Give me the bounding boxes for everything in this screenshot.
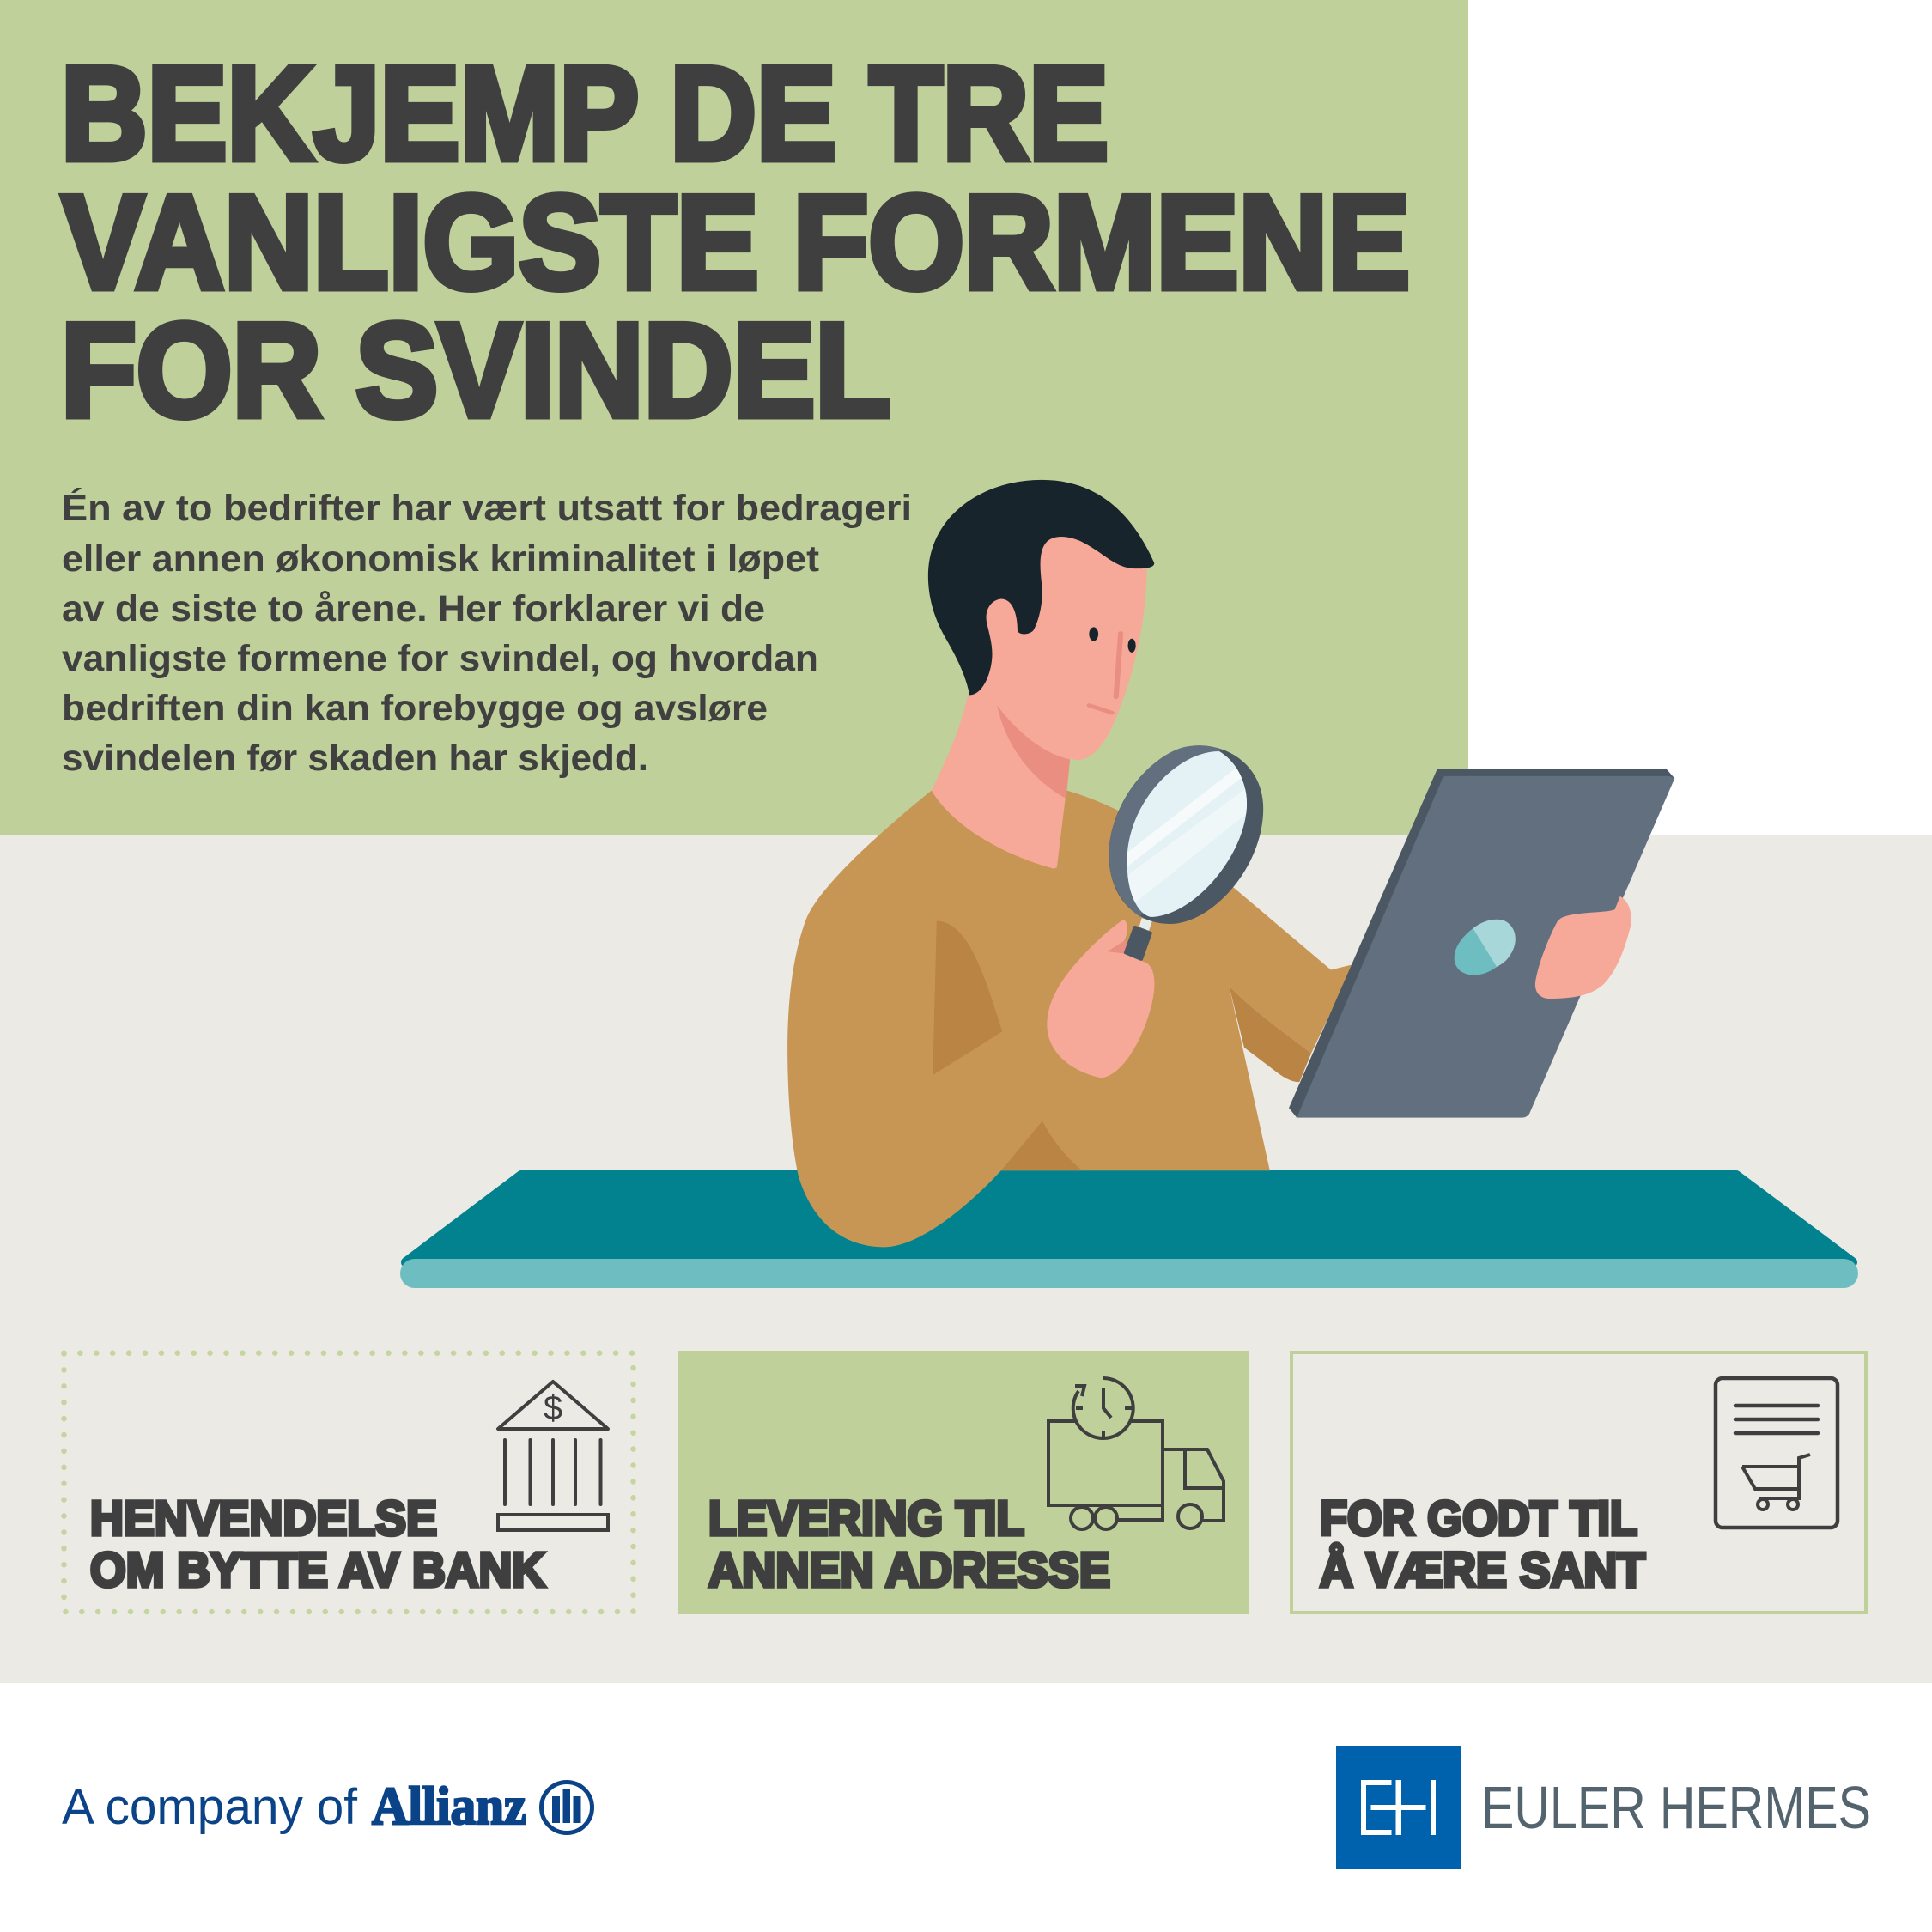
eyes <box>1089 627 1136 653</box>
icon: Allianz logo <box>541 1783 592 1832</box>
tablet <box>1289 769 1674 1118</box>
card heading: OM BYTTE AV BANK <box>90 1542 545 1597</box>
icon: truck with clock <box>1048 1378 1224 1529</box>
panel: green header <box>0 0 1468 835</box>
icon: bank: $ <box>544 1389 562 1427</box>
card heading: LEVERING TIL <box>708 1491 1024 1546</box>
illustration: man with magnifier and tablet <box>787 480 1674 1247</box>
hand holding magnifier <box>1047 920 1154 1078</box>
intro text block: bedriften din kan forebygge og avsløre <box>62 688 768 729</box>
hair <box>928 480 1154 695</box>
card: bank change request <box>64 1353 634 1612</box>
card heading: Å VÆRE SANT <box>1320 1542 1645 1597</box>
magnifying glass <box>1109 745 1263 959</box>
card heading: FOR GODT TIL <box>1320 1491 1637 1546</box>
face <box>963 527 1147 760</box>
neck shadow <box>997 705 1070 799</box>
title: FOR SVINDEL <box>61 295 890 445</box>
icon: bank <box>498 1382 608 1530</box>
title <box>61 39 1410 445</box>
footer: Euler Hermes logo <box>1336 1746 1871 1869</box>
hand holding tablet <box>1535 896 1631 999</box>
title: BEKJEMP DE TRE <box>61 39 1109 187</box>
panel: beige lower band <box>0 835 1932 1683</box>
card heading: HENVENDELSE <box>90 1491 437 1546</box>
card background <box>678 1351 1249 1614</box>
footer: A company of Allianz: Allianz <box>372 1777 526 1836</box>
footer: A company of Allianz: A company of <box>62 1779 358 1835</box>
dotted border <box>64 1353 634 1612</box>
intro text block: av de siste to årene. Her forklarer vi de <box>62 588 765 629</box>
intro text block: svindelen før skaden har skjedd. <box>62 738 648 779</box>
card border <box>1291 1352 1866 1613</box>
card: too good to be true <box>1291 1352 1866 1613</box>
title: VANLIGSTE FORMENE <box>62 168 1410 316</box>
card heading: ANNEN ADRESSE <box>708 1542 1110 1597</box>
nose and mouth <box>1089 634 1121 713</box>
sweater <box>787 791 1354 1247</box>
card heading <box>1320 1491 1645 1597</box>
card heading <box>708 1491 1110 1597</box>
intro text block: Én av to bedrifter har vært utsatt for bedrageri <box>62 488 912 529</box>
neck <box>932 683 1070 869</box>
table <box>400 1176 1858 1288</box>
footer: A company of Allianz <box>62 1777 592 1836</box>
intro text block <box>62 488 912 779</box>
intro text block: vanligste formene for svindel, og hvordan <box>62 638 818 679</box>
icon: document with shopping cart <box>1716 1378 1838 1528</box>
card: delivery to other address <box>678 1351 1249 1614</box>
card heading <box>90 1491 545 1597</box>
intro text block: eller annen økonomisk kriminalitet i løpet <box>62 538 819 580</box>
